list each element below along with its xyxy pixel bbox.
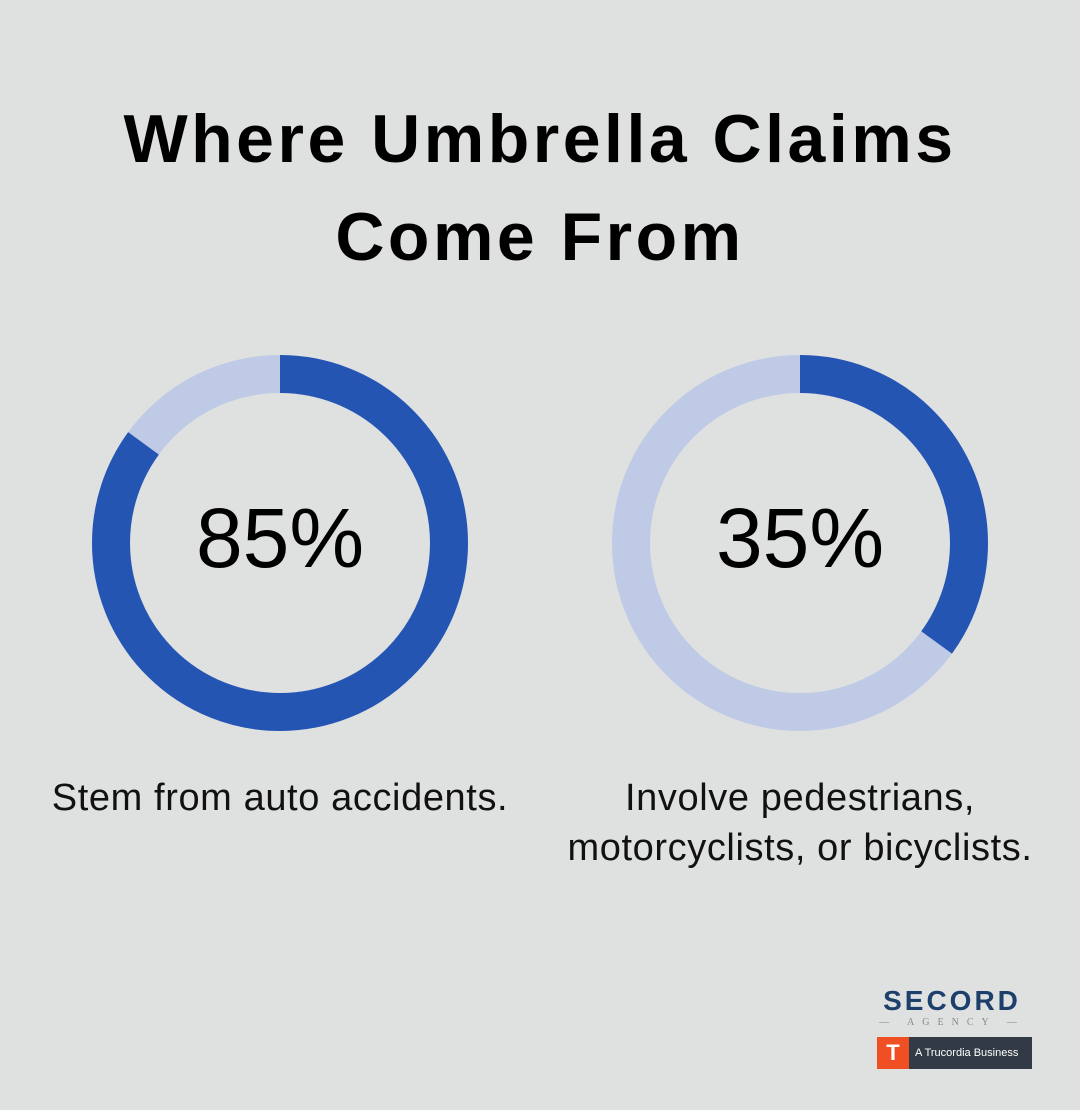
chart: 85% donut (92, 355, 468, 731)
title: Where Umbrella Claims (123, 101, 957, 177)
logo: SECORD (883, 985, 1021, 1016)
title: Come From (335, 199, 745, 275)
logo: — AGENCY — (879, 1017, 1025, 1028)
logo: T (886, 1040, 900, 1065)
logo (877, 985, 1032, 1069)
stat: 85%: 85% (196, 491, 364, 585)
caption: pedestrians (567, 777, 1032, 869)
chart: 35% donut (612, 355, 988, 731)
caption: pedestrians: motorcyclists, or bicyclists. (567, 827, 1032, 869)
caption: auto: Stem from auto accidents. (52, 777, 508, 819)
caption: pedestrians: Involve pedestrians, (625, 777, 975, 819)
title (123, 101, 957, 275)
stat: 35%: 35% (716, 491, 884, 585)
logo: A Trucordia Business (915, 1047, 1018, 1059)
